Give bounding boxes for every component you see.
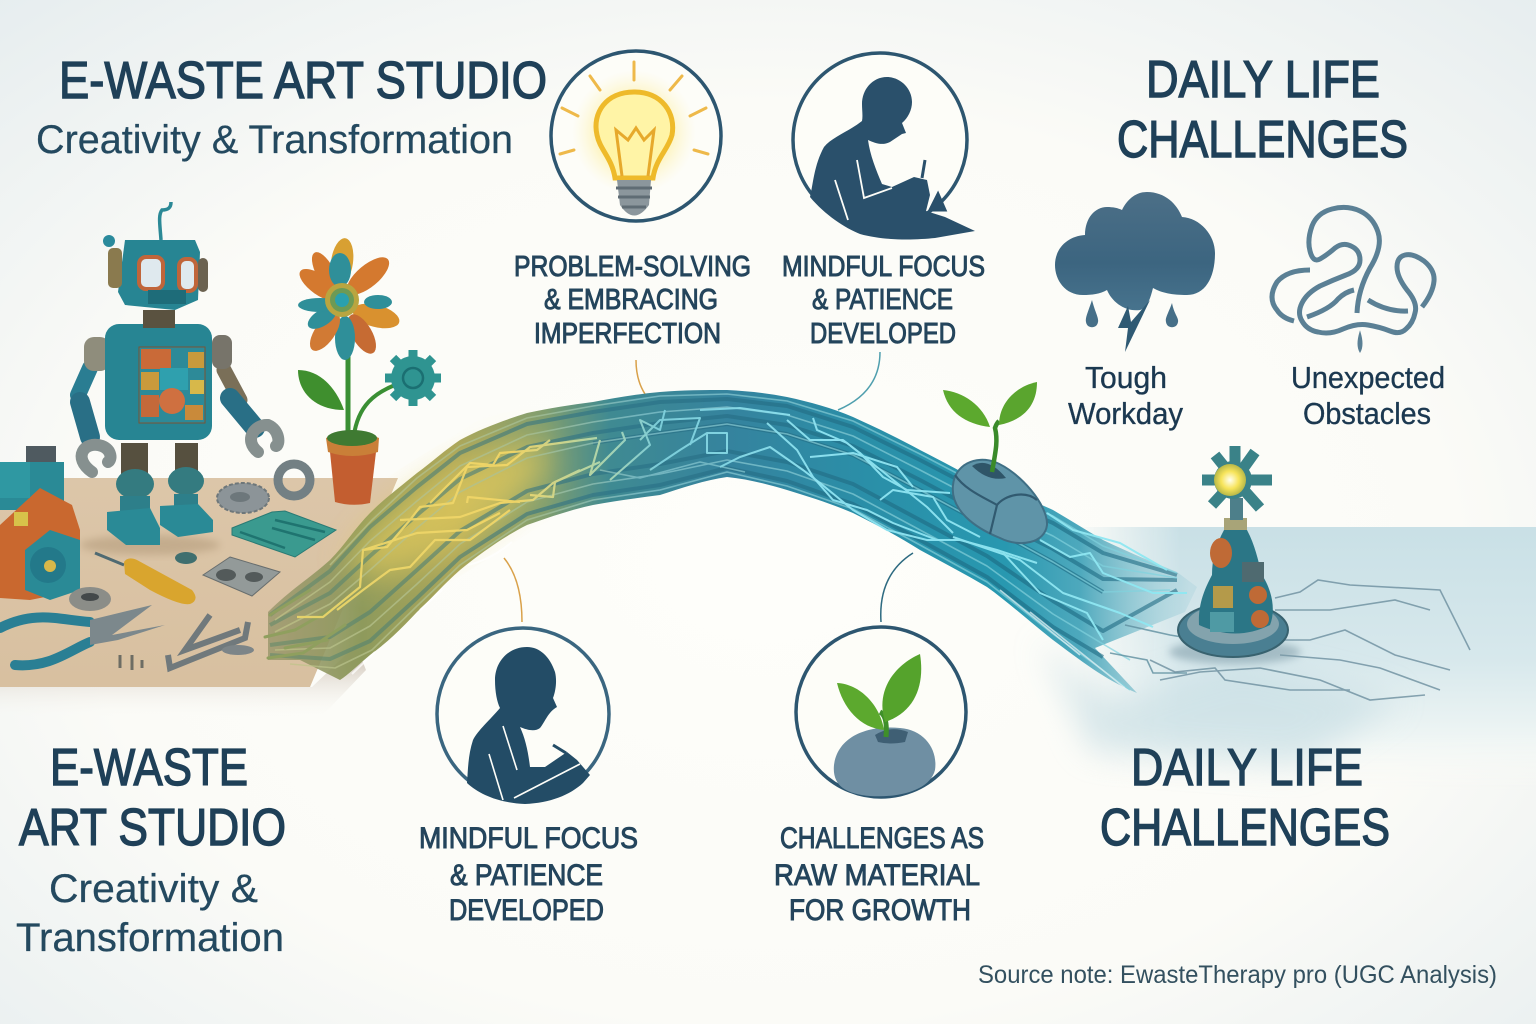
icon: person working, bottom [437,628,609,804]
label: tough workday: Workday [1068,396,1183,431]
label: problem-solving: IMPERFECTION [534,318,721,350]
connector lines [504,352,913,622]
label: mindful focus top: DEVELOPED [810,318,956,350]
petals [295,237,402,360]
label: mindful focus top: MINDFUL FOCUS [782,251,985,283]
label: tough workday [1068,360,1183,431]
title: E-Waste Art Studio bottom [16,739,286,960]
title: E-Waste Art Studio bottom: Transformation [16,916,284,960]
title: E-Waste Art Studio bottom: ART STUDIO [19,799,286,857]
pliers [0,617,90,665]
title: E-Waste Art Studio top: E-WASTE ART STUDIO [59,52,547,110]
label: unexpected obstacles: Obstacles [1303,396,1431,431]
pale strands [275,394,1177,690]
title: E-Waste Art Studio bottom: Creativity & [49,867,258,911]
pot [330,452,376,505]
workbench table [0,478,398,716]
faded lines toward tower [1110,625,1200,673]
label: challenges as raw material: FOR GROWTH [789,894,971,927]
seed stone with sprout [943,382,1047,543]
label: problem-solving: & EMBRACING [544,284,718,316]
arms [78,368,278,472]
label: problem-solving: PROBLEM-SOLVING [514,251,751,283]
icon: person working, top [793,53,975,239]
body [105,324,212,440]
small screws [120,655,142,670]
bridge body [268,390,1197,693]
title: E-Waste Art Studio top: Creativity & Transformation [36,118,513,162]
cyan circuit traces [610,408,1187,640]
robot [78,202,278,545]
underside loops [352,542,512,674]
ground cracks [1150,580,1470,700]
label: tough workday: Tough [1085,360,1167,395]
label: mindful focus top [782,251,985,350]
title: Daily Life Challenges top: CHALLENGES [1117,111,1408,169]
antenna [160,202,171,240]
circuit board [232,511,336,557]
flower in a pot [295,237,441,505]
wrench tools [168,615,248,668]
label: challenges as raw material [774,822,984,927]
golden glow [334,420,566,600]
source note: Source note: EwasteTherapy pro (UGC Analysis) [978,961,1497,989]
glowing gear tower [1169,446,1301,664]
screwdriver [95,553,124,565]
legs [121,443,148,477]
bridge of circuit wires [265,390,1200,693]
label: mindful focus bottom: DEVELOPED [449,894,604,927]
chest panel [139,347,205,423]
label: unexpected obstacles [1291,360,1445,431]
title: Daily Life Challenges bottom: CHALLENGES [1100,799,1390,857]
small blob [175,552,197,564]
label: challenges as raw material: CHALLENGES AS [780,822,984,855]
label: challenges as raw material: RAW MATERIAL [774,859,980,892]
icon: light bulb in circle [551,51,721,221]
label: unexpected obstacles: Unexpected [1291,360,1445,395]
horizon water surface [1040,527,1536,792]
washer [69,587,111,611]
title: Daily Life Challenges bottom: DAILY LIFE [1131,739,1363,797]
head [103,235,208,310]
tools and parts on the table [0,464,336,670]
icon: storm cloud [1055,192,1215,352]
icon: tangled obstacles [1272,207,1434,352]
title: E-Waste Art Studio bottom: E-WASTE [50,739,248,797]
label: mindful focus bottom [419,822,638,927]
pile of e-waste parts [0,446,80,600]
golden circuit traces [297,432,625,617]
gear flower [391,356,435,400]
title: Daily Life Challenges top [1117,51,1408,169]
title: E-Waste Art Studio top [36,52,547,162]
label: problem-solving [514,251,751,350]
icon: sprout from stone in circle [796,627,966,797]
dark strands [270,399,1177,659]
label: mindful focus bottom: & PATIENCE [450,859,603,892]
label: mindful focus top: & PATIENCE [812,284,953,316]
title: Daily Life Challenges top: DAILY LIFE [1146,51,1380,109]
gears [217,483,269,513]
title: Daily Life Challenges bottom [1100,739,1390,857]
label: mindful focus bottom: MINDFUL FOCUS [419,822,638,855]
chip plate [203,557,280,596]
frayed tips on table [265,590,345,658]
